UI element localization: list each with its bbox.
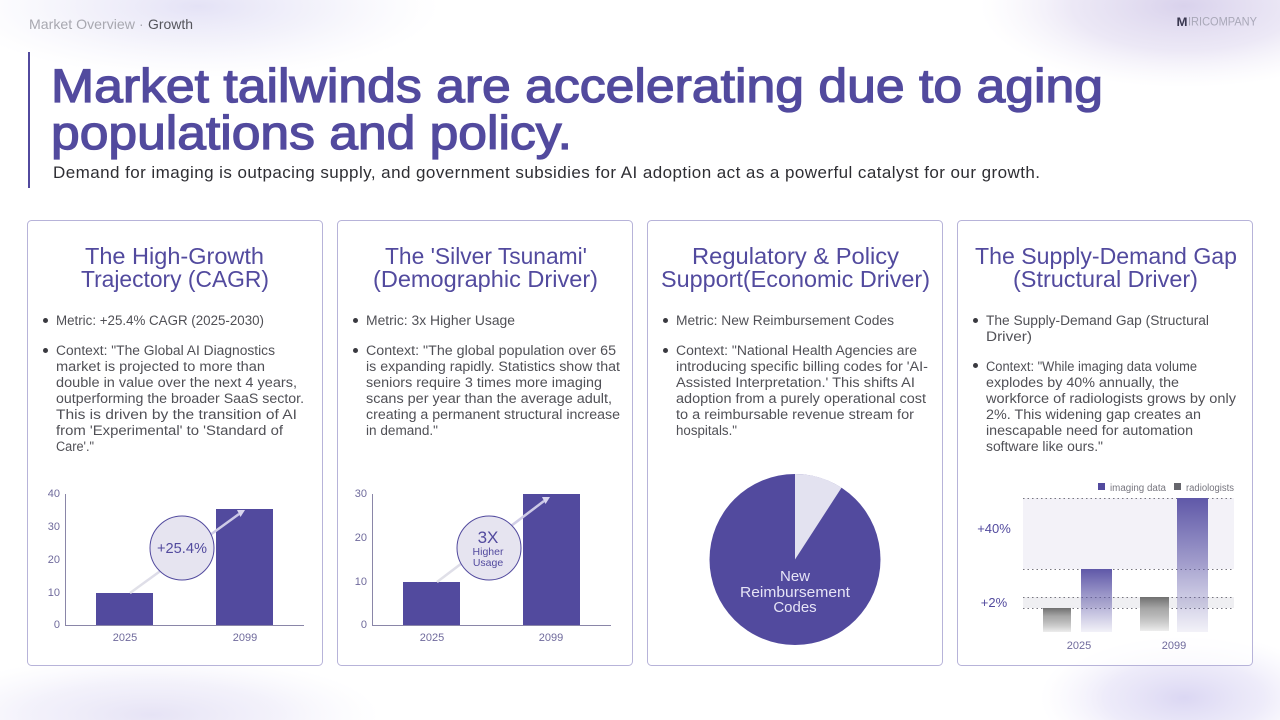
bullet text: Context: "The Global AI Diagnostics bbox=[56, 343, 275, 358]
bullet text: Assisted Interpretation.' This shifts AI bbox=[676, 375, 915, 390]
logo: M bbox=[1176, 15, 1188, 29]
gap chart: +40% bbox=[977, 521, 1011, 536]
bar chart: usage: 2025 bbox=[420, 632, 444, 644]
logo: IRICOMPANY bbox=[1188, 16, 1257, 28]
heading bbox=[373, 243, 598, 292]
breadcrumb bbox=[29, 16, 193, 32]
heading: The Supply-Demand Gap bbox=[975, 243, 1237, 269]
bar chart: usage: 10 bbox=[355, 576, 367, 588]
bar chart: CAGR: 0 bbox=[54, 619, 60, 631]
heading: (Structural Driver) bbox=[1013, 266, 1198, 292]
arrow bbox=[130, 510, 245, 593]
bullet text: is expanding rapidly. Statistics show that bbox=[366, 359, 620, 374]
bar chart: usage: 0 bbox=[361, 619, 367, 631]
bullet text: explodes by 40% annually, the bbox=[986, 375, 1179, 390]
callout: +25.4% bbox=[157, 540, 207, 557]
breadcrumb: Market Overview bbox=[29, 16, 136, 32]
pie chart bbox=[710, 474, 880, 645]
pie label: Reimbursement bbox=[740, 584, 851, 601]
bullet text: Context: "While imaging data volume bbox=[986, 359, 1197, 374]
bullet text bbox=[973, 313, 1236, 454]
bullet text bbox=[353, 313, 620, 438]
bullet text bbox=[43, 313, 304, 454]
bullet text: scans per year than the average adult, bbox=[366, 391, 612, 406]
breadcrumb: Growth bbox=[148, 16, 193, 32]
callout bbox=[457, 516, 521, 580]
pie label bbox=[740, 568, 851, 616]
pie label: New bbox=[780, 568, 810, 585]
bar chart: CAGR: 40 bbox=[48, 488, 60, 500]
bar chart: CAGR: 2099 bbox=[233, 632, 257, 644]
bullet text: The Supply-Demand Gap (Structural bbox=[986, 313, 1209, 328]
heading: Regulatory & Policy bbox=[692, 243, 900, 269]
gap chart bbox=[977, 483, 1234, 652]
bar chart: usage: 2099 bbox=[539, 632, 563, 644]
bar chart: usage bbox=[355, 488, 611, 644]
bullet text: introducing specific billing codes for 'AI- bbox=[676, 359, 928, 374]
bullet text: Care'." bbox=[56, 439, 94, 454]
callout: Higher bbox=[473, 546, 504, 558]
bar chart: CAGR: 10 bbox=[48, 587, 60, 599]
bullet text: inescapable need for automation bbox=[986, 423, 1193, 438]
callout bbox=[150, 516, 214, 580]
bullet text: market is projected to more than bbox=[56, 359, 265, 374]
bar chart: CAGR: 2025 bbox=[113, 632, 137, 644]
pie label: Codes bbox=[773, 599, 817, 616]
bullet text: This is driven by the transition of AI bbox=[56, 407, 297, 422]
callout: Usage bbox=[473, 557, 503, 569]
bullet text: seniors require 3 times more imaging bbox=[366, 375, 602, 390]
heading: (Demographic Driver) bbox=[373, 266, 598, 292]
bullet text: outperforming the broader SaaS sector. bbox=[56, 391, 304, 406]
bar chart: CAGR: 30 bbox=[48, 521, 60, 533]
legend bbox=[1098, 483, 1234, 494]
bullet text: in demand." bbox=[366, 423, 438, 438]
bullet text: to a reimbursable revenue stream for bbox=[676, 407, 915, 422]
bullet text bbox=[663, 313, 928, 438]
bar chart: CAGR bbox=[48, 488, 304, 644]
bullet text: 2%. This widening gap creates an bbox=[986, 407, 1201, 422]
bullet text: from 'Experimental' to 'Standard of bbox=[56, 423, 283, 438]
bullet text: Metric: +25.4% CAGR (2025-2030) bbox=[56, 313, 264, 328]
legend: imaging data bbox=[1110, 483, 1166, 494]
bullet text: creating a permanent structural increase bbox=[366, 407, 620, 422]
gap chart: 2025 bbox=[1067, 640, 1091, 652]
bullet text: hospitals." bbox=[676, 423, 737, 438]
title: Market tailwinds are accelerating due to aging bbox=[51, 59, 1103, 112]
gap chart: 2099 bbox=[1162, 640, 1186, 652]
bullet text: Metric: New Reimbursement Codes bbox=[676, 313, 894, 328]
bullet text: software like ours." bbox=[986, 439, 1103, 454]
bullet text: double in value over the next 4 years, bbox=[56, 375, 297, 390]
heading bbox=[975, 243, 1237, 292]
bullet text: adoption from a purely operational cost bbox=[676, 391, 926, 406]
breadcrumb: · bbox=[139, 16, 144, 32]
heading: Trajectory (CAGR) bbox=[81, 266, 269, 292]
heading bbox=[81, 243, 269, 292]
bullet text: Context: "National Health Agencies are bbox=[676, 343, 917, 358]
bar chart: CAGR: 20 bbox=[48, 554, 60, 566]
bullet text: Driver) bbox=[986, 329, 1032, 344]
panel: silver tsunami bbox=[338, 220, 632, 666]
title bbox=[51, 59, 1103, 159]
bullet text: Context: "The global population over 65 bbox=[366, 343, 616, 358]
heading: The 'Silver Tsunami' bbox=[385, 243, 587, 269]
title accent rule bbox=[28, 52, 30, 188]
callout: 3X bbox=[478, 528, 498, 547]
bar chart: usage: 20 bbox=[355, 532, 367, 544]
bullet text: Metric: 3x Higher Usage bbox=[366, 313, 515, 328]
bar chart: usage: 30 bbox=[355, 488, 367, 500]
gap chart: +2% bbox=[981, 595, 1008, 610]
arrow bbox=[437, 497, 550, 582]
heading bbox=[661, 243, 930, 292]
heading: The High-Growth bbox=[85, 243, 264, 269]
bullet text: workforce of radiologists grows by only bbox=[985, 391, 1236, 406]
panel: supply-demand gap bbox=[958, 220, 1252, 666]
heading: Support(Economic Driver) bbox=[661, 266, 930, 292]
panel: high-growth trajectory bbox=[28, 220, 322, 666]
subtitle: Demand for imaging is outpacing supply, and government subsidies for AI adoption act as a powerful catalyst for our growth. bbox=[53, 163, 1040, 182]
title: populations and policy. bbox=[51, 106, 572, 159]
legend: radiologists bbox=[1186, 483, 1234, 494]
panel: regulatory and policy bbox=[648, 220, 942, 666]
